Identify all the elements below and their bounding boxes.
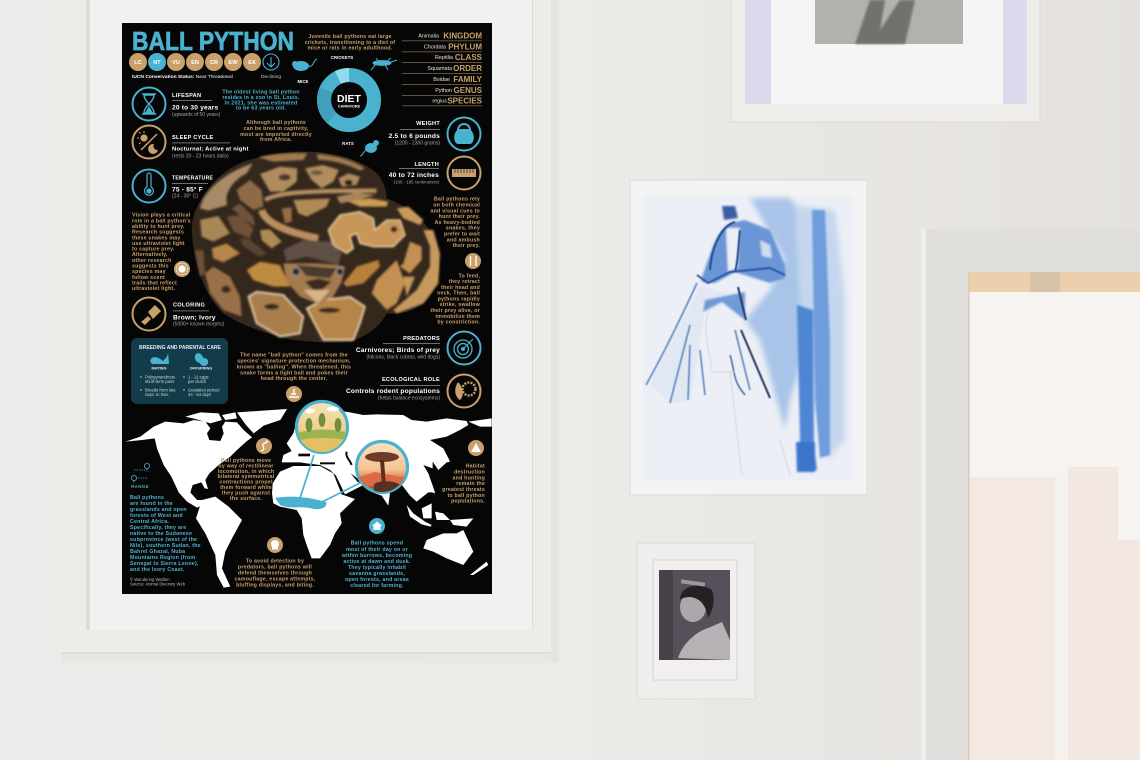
- oldest python fact: In 2021, she was estimated: [225, 101, 297, 107]
- offspring facts: [183, 374, 220, 397]
- defense text: bluffing displays, and biting.: [236, 582, 314, 588]
- sleep cycle stat: (rests 20 - 23 hours daily): [172, 154, 229, 160]
- mating facts: Breeds from late: [145, 387, 176, 392]
- habitat text: active at dawn and dusk.: [343, 559, 411, 565]
- weight stat: (1200 - 2300 grams): [395, 140, 440, 146]
- juvenile diet text: [305, 34, 395, 51]
- threats text: and hunting: [452, 475, 485, 481]
- feeding text: by constriction.: [437, 320, 480, 326]
- taxonomy list: Squamata: [427, 66, 452, 72]
- conservation status badges: EX: [248, 60, 256, 66]
- offspring facts: per clutch: [188, 379, 207, 384]
- hunting text: Ball pythons rely: [434, 197, 480, 203]
- habitat text: open forests, and areas: [345, 577, 409, 583]
- oldest python fact: resides in a zoo in St. Louis.: [222, 95, 300, 101]
- title: BALL PYTHON: [132, 26, 294, 56]
- balling text: snake forms a tight ball and pokes their: [240, 370, 348, 376]
- taxonomy list: GENUS: [454, 86, 483, 95]
- icon: warning: [468, 440, 484, 456]
- threats text: populations.: [451, 499, 485, 505]
- captivity fact: most are imported directly: [240, 132, 312, 138]
- range text: grasslands and open: [130, 507, 187, 513]
- taxonomy list: Animalia: [418, 34, 439, 40]
- vision text: Vision plays a critical: [132, 213, 191, 219]
- sleep cycle stat: SLEEP CYCLE: [172, 135, 214, 141]
- sleep cycle stat: [132, 126, 249, 160]
- range highlight on Africa: [275, 455, 362, 509]
- feeding text: To feed,: [458, 273, 480, 279]
- panel: breeding and parental care: BREEDING AND PARENTAL CARE: [139, 345, 222, 351]
- ecological role stat: [346, 374, 480, 408]
- movement text: Ball pythons move: [221, 458, 271, 464]
- predators stat: Carnivores; Birds of prey: [356, 347, 440, 354]
- temperature stat: 75 - 85° F: [172, 185, 203, 193]
- icon: mating snakes: [150, 352, 169, 364]
- taxonomy list: [402, 31, 483, 106]
- threats text: [442, 464, 485, 505]
- juvenile diet text: crickets, transitioning to a diet of: [305, 40, 395, 46]
- diet label: rats: RATS: [342, 141, 354, 146]
- hunting text: snakes, they: [446, 226, 480, 232]
- icon: cricket: [371, 58, 397, 70]
- conservation status badges: LC: [134, 60, 142, 66]
- vision text: [132, 213, 191, 292]
- hunting text: As heavy-bodied: [435, 220, 480, 226]
- icon: declining arrow: [263, 54, 279, 70]
- temperature stat: (24 - 30° C): [172, 194, 198, 200]
- americas and greenland: [125, 409, 287, 588]
- juvenile diet text: Juvenile ball pythons eat large: [308, 34, 392, 40]
- vision text: Research suggests: [132, 230, 184, 236]
- mating facts: short-term pairs: [145, 379, 174, 384]
- vision text: species may: [132, 269, 166, 275]
- feeding text: their prey alive, or: [430, 308, 480, 314]
- icon: mask: [267, 537, 283, 553]
- taxonomy list: Reptilia: [435, 55, 453, 61]
- world map: [125, 409, 492, 588]
- framed watercolour dress: [630, 180, 867, 495]
- diet label: mice: MICE: [298, 79, 309, 84]
- range text: [130, 495, 201, 573]
- captivity fact: [240, 120, 312, 143]
- movement text: bilateral symmetrical: [218, 474, 275, 480]
- habitat circle: grassland: [296, 402, 350, 458]
- coloring stat: Brown; Ivory: [173, 314, 216, 321]
- range text: Specifically, they are: [130, 525, 186, 531]
- balling text: head through the center.: [261, 376, 328, 382]
- temperature stat: [132, 170, 213, 202]
- conservation status text: IUCN Conservation Status: Near Threatened: [132, 74, 233, 80]
- threats text: remain the: [456, 481, 485, 487]
- taxonomy list: SPECIES: [447, 96, 483, 105]
- taxonomy list: ORDER: [453, 64, 482, 73]
- declining label: Declining: [261, 74, 281, 80]
- taxonomy list: Chordata: [424, 44, 446, 50]
- habitat text: most of their day on or: [346, 547, 408, 553]
- weight stat: [389, 118, 480, 150]
- defense text: camouflage, escape attempts,: [235, 576, 316, 582]
- movement text: locomotion, in which: [218, 469, 274, 475]
- movement text: by way of rectilinear: [218, 463, 274, 469]
- hunting text: [430, 197, 481, 249]
- coloring stat: (5000+ known morphs): [173, 322, 225, 328]
- habitat text: [341, 541, 412, 589]
- icon: snake movement: [256, 438, 272, 454]
- eurasia africa australia: [272, 410, 492, 575]
- diet label: crickets: CRICKETS: [331, 55, 353, 60]
- oldest python fact: [222, 90, 300, 112]
- taxonomy list: KINGDOM: [443, 31, 482, 40]
- defense text: predators, ball pythons will: [238, 565, 312, 571]
- framed sketch at top right: [731, 0, 1040, 122]
- conservation status badges: EW: [228, 60, 238, 66]
- balling text: [237, 353, 351, 382]
- movement text: contractions propel: [219, 480, 273, 486]
- range text: Central Africa.: [130, 519, 169, 525]
- captivity fact: Although ball pythons: [246, 120, 306, 126]
- vision text: other research: [132, 258, 172, 264]
- offspring facts: 44 - 54 days: [188, 392, 211, 397]
- icon: range markers: [131, 463, 150, 484]
- ecological role stat: Controls rodent populations: [346, 388, 440, 395]
- doorway on the right: [921, 229, 1140, 760]
- taxonomy list: Boidae: [433, 77, 450, 83]
- range text: Mountains Region (from: [130, 555, 195, 561]
- coloring stat: [132, 298, 225, 330]
- panel: breeding and parental care: MATING: [151, 366, 167, 371]
- captivity fact: can be bred in captivity,: [244, 126, 309, 132]
- lifespan stat: [132, 88, 221, 120]
- habitat text: savanna grasslands,: [349, 571, 405, 577]
- balling text: The name "ball python" comes from the: [240, 353, 348, 359]
- hunting text: and ambush: [447, 237, 480, 243]
- predators stat: PREDATORS: [403, 336, 440, 342]
- lifespan stat: 20 to 30 years: [172, 105, 219, 112]
- habitat text: cleared for farming.: [350, 583, 404, 589]
- diet donut chart: DIET: [337, 93, 362, 105]
- hunting text: and visual cues to: [430, 208, 481, 214]
- panel: breeding and parental care: [131, 338, 228, 404]
- credits: [130, 577, 186, 586]
- feeding text: neck. Then, ball: [437, 291, 480, 297]
- range text: and the Ivory Coast.: [130, 567, 185, 573]
- vision text: use ultraviolet light: [132, 241, 185, 247]
- captivity fact: from Africa.: [260, 137, 292, 143]
- range text: Ball pythons: [130, 495, 164, 501]
- lifespan stat: (upwards of 50 years): [172, 112, 221, 118]
- threats text: to ball python: [447, 493, 485, 499]
- panel: breeding and parental care: OFFSPRING: [190, 366, 212, 371]
- movement text: [218, 458, 275, 502]
- vision text: these snakes may: [132, 235, 181, 241]
- hunting text: hunt their prey.: [439, 214, 480, 220]
- range text: are found in the: [130, 501, 173, 507]
- movement text: the surface.: [230, 496, 262, 502]
- vision text: Alternatively,: [132, 252, 168, 258]
- hunting text: prefer to wait: [444, 232, 480, 238]
- range text: native to the Sudanese: [130, 531, 192, 537]
- taxonomy list: regius: [432, 98, 447, 104]
- feeding text: strike, swallow: [440, 302, 481, 308]
- hunting text: on both chemical: [433, 202, 480, 208]
- predators stat: (falcons, black cobras, wild dogs): [366, 355, 440, 361]
- weight stat: 2.5 to 6 pounds: [389, 133, 440, 140]
- habitat text: Ball pythons spend: [351, 541, 403, 547]
- vision text: role in a ball python's: [132, 218, 191, 224]
- oldest python fact: to be 63 years old.: [236, 106, 286, 112]
- conservation status badges: [129, 53, 261, 71]
- vision text: ultraviolet light.: [132, 286, 175, 292]
- taxonomy list: FAMILY: [453, 75, 483, 84]
- icon: eggs: [193, 352, 208, 366]
- length stat: [389, 156, 480, 190]
- diet donut chart: [324, 75, 374, 125]
- large white frame: [61, 0, 559, 663]
- icon: eye: [174, 261, 190, 277]
- ecological role stat: ECOLOGICAL ROLE: [382, 377, 440, 383]
- defense text: [235, 559, 316, 588]
- taxonomy list: CLASS: [455, 53, 483, 62]
- feeding text: immobilize them: [436, 314, 480, 320]
- offspring facts: Gestation period:: [188, 387, 220, 392]
- icon: mouse: [292, 59, 317, 71]
- balling text: known as "balling". When threatened, this: [237, 364, 351, 370]
- vision text: suggests this: [132, 264, 169, 270]
- range text: Senegal to Sierra Leone),: [130, 561, 199, 567]
- feeding text: they retract: [449, 279, 480, 285]
- temperature stat: TEMPERATURE: [172, 176, 213, 182]
- diet donut chart: CARNIVORE: [338, 104, 361, 108]
- framed portrait photo: [637, 543, 755, 699]
- mating facts: [140, 374, 176, 397]
- oldest python fact: The oldest living ball python: [222, 90, 300, 96]
- coloring stat: COLORING: [173, 303, 205, 309]
- mating facts: Polygynandrous: [145, 374, 175, 379]
- range text: subprovince (west of the: [130, 537, 197, 543]
- lifespan stat: LIFESPAN: [172, 93, 201, 99]
- poster: [122, 23, 492, 594]
- taxonomy list: Python: [435, 88, 452, 94]
- mating facts: Sept. to Nov.: [145, 392, 169, 397]
- range text: Nile), southern Sudan, the: [130, 543, 201, 549]
- threats text: Habitat: [466, 464, 485, 470]
- length stat: LENGTH: [414, 162, 439, 168]
- icon: home: [369, 518, 385, 534]
- predators stat: [356, 332, 480, 364]
- habitat text: within burrows, becoming: [341, 553, 412, 559]
- snake photo illustration: [192, 152, 440, 342]
- habitat text: They typically inhabit: [348, 565, 406, 571]
- defense text: defend themselves through: [238, 570, 312, 576]
- weight stat: WEIGHT: [416, 121, 440, 127]
- juvenile diet text: mice or rats in early adulthood.: [308, 45, 393, 51]
- range label: RANGE: [131, 484, 149, 489]
- defense text: To avoid detection by: [246, 559, 304, 565]
- vision text: follow scent: [132, 275, 165, 281]
- threats text: greatest threats: [442, 487, 485, 493]
- conservation status badges: CR: [210, 60, 218, 66]
- ecological role stat: (helps balance ecosystems): [378, 396, 440, 402]
- feeding text: pythons rapidly: [438, 296, 480, 302]
- icon: rat: [360, 140, 379, 156]
- balling text: species' signature protection mechanism,: [237, 359, 351, 365]
- conservation status badges: NT: [153, 60, 161, 66]
- sleep cycle stat: Nocturnal; Active at night: [172, 147, 249, 153]
- feeding text: [430, 273, 481, 326]
- length stat: 40 to 72 inches: [389, 172, 439, 179]
- vision text: to capture prey.: [132, 247, 175, 253]
- hunting text: their prey.: [453, 243, 480, 249]
- vision text: trails that reflect: [132, 280, 177, 286]
- habitat circle: savanna: [356, 442, 408, 494]
- taxonomy list: PHYLUM: [448, 42, 482, 51]
- conservation status badges: EN: [191, 60, 199, 66]
- length stat: (100 - 185 centimeters): [394, 180, 440, 184]
- icon: fork and knife: [465, 253, 481, 269]
- feeding text: their head and: [441, 285, 480, 291]
- movement text: they push against: [222, 490, 270, 496]
- movement text: them forward while: [220, 485, 272, 491]
- threats text: destruction: [454, 470, 485, 476]
- range text: Bahrel Ghazal, Nuba: [130, 549, 185, 555]
- vision text: ability to hunt prey.: [132, 224, 185, 230]
- icon: coiled snake: [286, 386, 302, 402]
- conservation status badges: VU: [172, 60, 180, 66]
- range text: forests of West and: [130, 513, 183, 519]
- credits: © Wandering Walden: [130, 577, 170, 582]
- credits: Source: Animal Diversity Web: [130, 582, 186, 586]
- offspring facts: 1 - 11 eggs: [188, 374, 209, 379]
